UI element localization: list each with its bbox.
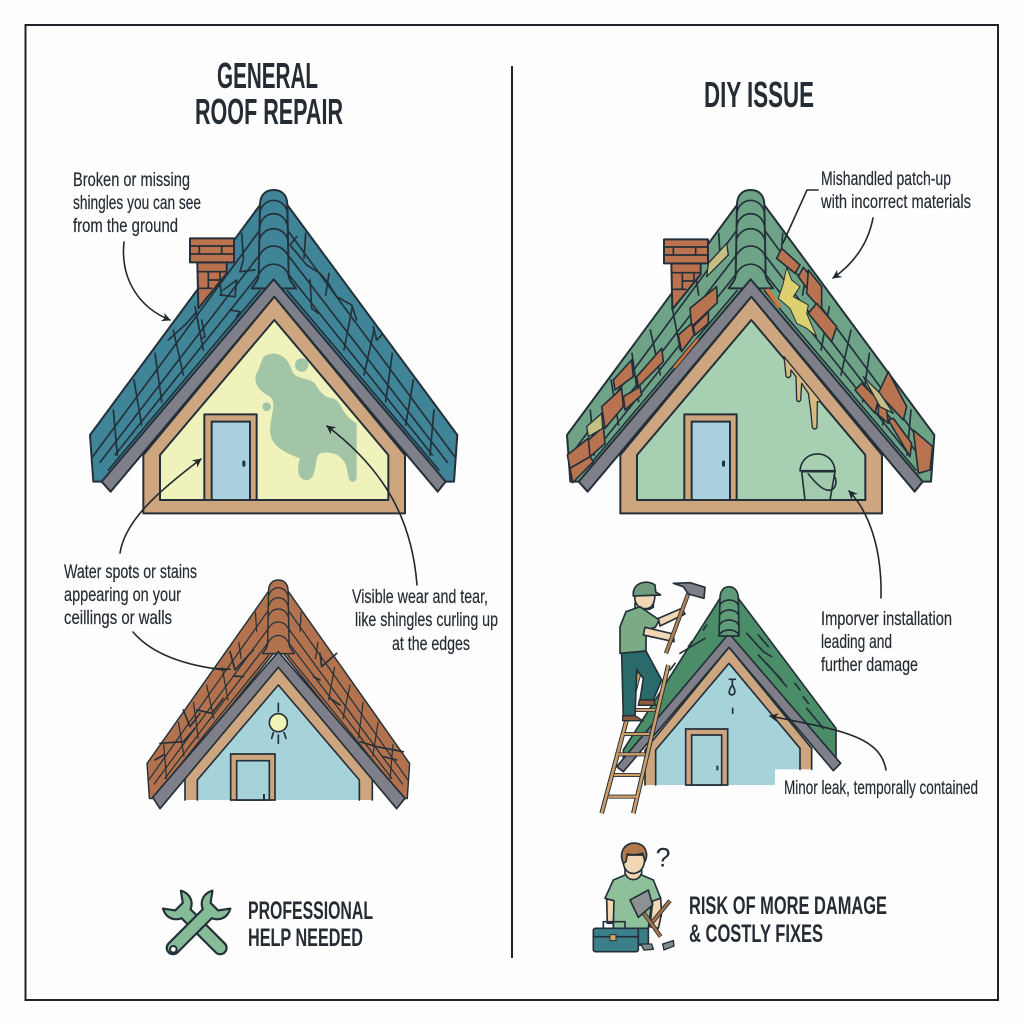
callout: water spots or stains: ceillings or walls <box>64 608 172 629</box>
ladder <box>602 665 668 813</box>
icon: confused diy person with toolbox: ? <box>656 843 670 873</box>
roof cracks <box>155 650 403 760</box>
panel: diy issue <box>567 74 978 952</box>
door <box>204 414 257 500</box>
illustration: green roof house with ladder and worker <box>602 582 841 813</box>
bucket <box>800 454 836 500</box>
arrow: minor leak to wall <box>770 716 886 770</box>
callout: mishandled patch-up: with incorrect materials <box>820 192 971 213</box>
hammer <box>666 583 705 653</box>
conclusion: risk of more damage: RISK OF MORE DAMAGE <box>689 892 887 920</box>
callout: improper installation: leading and <box>821 632 892 653</box>
ceiling lamp <box>269 703 287 743</box>
callout: mishandled patch-up <box>820 169 971 213</box>
callout: water spots or stains: Water spots or stains <box>64 562 197 583</box>
callout: visible wear and tear: at the edges <box>392 634 470 655</box>
worker <box>620 582 705 721</box>
callout: visible wear and tear <box>352 587 498 655</box>
callout: mishandled patch-up: Mishandled patch-up <box>821 169 951 190</box>
roof cracks <box>168 237 382 340</box>
callout: visible wear and tear: like shingles curling up <box>355 610 498 631</box>
callout: improper installation: Imporver installation <box>821 609 952 630</box>
hammer and tools <box>630 890 670 937</box>
conclusion: professional help needed <box>248 897 373 952</box>
yellow sealant patch <box>778 267 817 337</box>
title: diy issue: DIY ISSUE <box>704 74 814 115</box>
toolbox <box>593 922 638 952</box>
panel: general roof repair <box>64 55 498 963</box>
callout: visible wear and tear: Visible wear and tear, <box>352 587 488 608</box>
leak drop <box>729 679 735 713</box>
illustration: teal roof house with water stain <box>90 190 457 513</box>
callout: broken or missing shingles: Broken or missing <box>73 170 190 191</box>
callout: improper installation: further damage <box>821 655 918 676</box>
door <box>231 754 275 800</box>
arrow: to broken shingles <box>123 242 170 320</box>
callout: water spots or stains <box>64 562 197 629</box>
mismatched brick shingle patches <box>567 248 933 483</box>
leader: patch-up to ridge <box>783 190 818 243</box>
conclusion: professional help needed: PROFESSIONAL <box>248 897 373 925</box>
callout: broken or missing shingles <box>73 170 201 237</box>
arrow: water spots to door wall <box>120 459 201 553</box>
water stain <box>255 353 357 482</box>
door <box>686 729 728 785</box>
title: general roof repair <box>195 55 343 132</box>
illustration: patched green roof house with bucket <box>567 190 934 513</box>
title: general roof repair: GENERAL <box>217 55 318 96</box>
arrow: wear and tear to stain <box>327 426 417 585</box>
callout: water spots or stains: appearing on your <box>64 585 182 606</box>
arrow: water spots to brown roof <box>133 632 225 670</box>
door <box>684 414 737 500</box>
arrow: incorrect materials <box>833 218 873 278</box>
title: general roof repair: ROOF REPAIR <box>195 91 343 132</box>
arrow: improper installation to bucket wall <box>849 491 881 598</box>
callout: improper installation <box>821 609 952 676</box>
icon: crossed wrenches <box>158 889 235 963</box>
illustration: brown roof house with lamp <box>147 580 410 809</box>
conclusion: risk of more damage <box>689 892 887 948</box>
sealant drips <box>784 357 821 429</box>
callout: broken or missing shingles: from the ground <box>73 216 178 237</box>
callout: broken or missing shingles: shingles you can see <box>73 193 201 214</box>
icon: confused diy person with toolbox <box>593 843 674 952</box>
conclusion: risk of more damage: & COSTLY FIXES <box>689 920 823 948</box>
conclusion: professional help needed: HELP NEEDED <box>248 924 363 952</box>
green roof <box>623 598 836 770</box>
